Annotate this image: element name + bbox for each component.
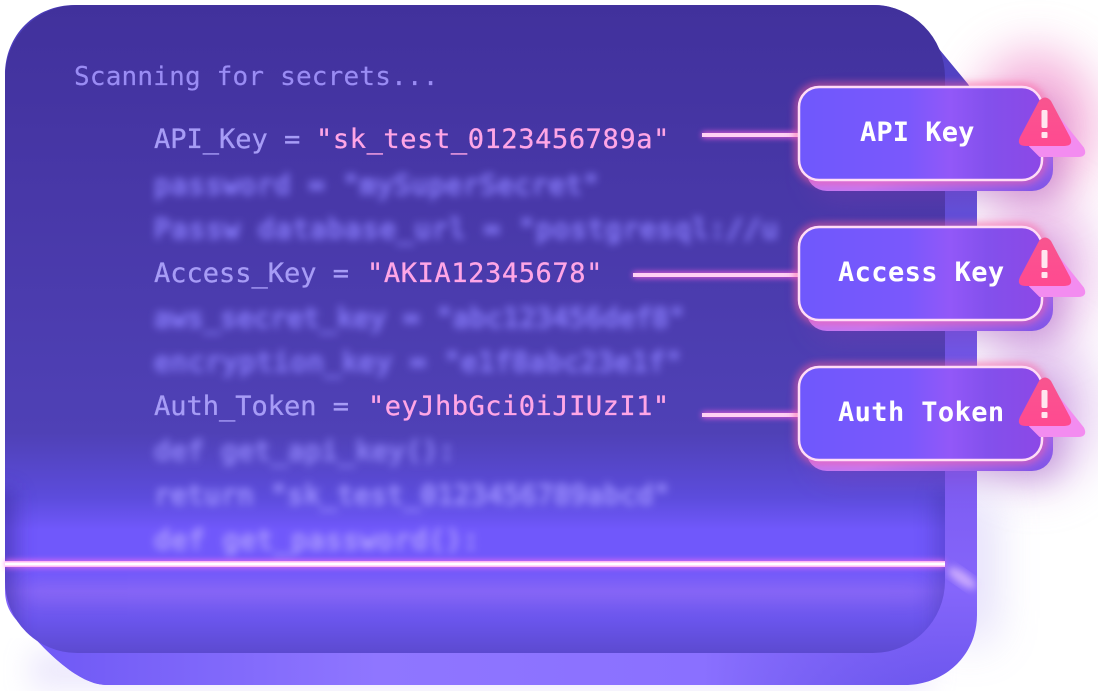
code: blurred lines: def get_api_key(): bbox=[154, 436, 456, 467]
code line: API key: API_Key = bbox=[154, 124, 300, 155]
scan line bbox=[5, 560, 945, 568]
tag: API Key bbox=[798, 86, 1084, 200]
code: blurred lines: def get_password(): bbox=[154, 525, 480, 556]
tag back plate bbox=[806, 376, 1053, 471]
tag label: Auth Token bbox=[838, 397, 1005, 428]
code line: auth token: Auth_Token = bbox=[154, 391, 349, 422]
icon: warning triangle bbox=[1019, 98, 1084, 156]
tag glow bbox=[798, 366, 1043, 461]
tag back plate bbox=[806, 96, 1053, 191]
connector: API key bbox=[702, 132, 799, 138]
scan reflection band bbox=[30, 588, 920, 598]
code: blurred lines: password = "mySuperSecret" bbox=[154, 170, 600, 201]
tag: Access Key bbox=[798, 226, 1084, 340]
code: blurred lines: aws_secret_key = "abc123456def8" bbox=[154, 303, 685, 334]
panel bottom edge bbox=[38, 641, 836, 685]
code: blurred lines bbox=[154, 170, 779, 556]
code: blurred lines: encryption_key = "e1f8abc23e1f" bbox=[154, 347, 683, 378]
tag shadow bbox=[812, 380, 1062, 480]
tag face bbox=[799, 367, 1042, 460]
heading: scanning for secrets: Scanning for secrets... bbox=[74, 62, 439, 92]
code: blurred lines: Passw database_url = "postgresql://u bbox=[154, 214, 779, 245]
tag back plate bbox=[806, 236, 1053, 331]
code: blurred lines: return "sk_test_0123456789abcd" bbox=[154, 480, 670, 511]
tag glow bbox=[798, 86, 1043, 181]
tag glow bbox=[798, 226, 1043, 321]
tag face bbox=[799, 227, 1042, 320]
code line: access key: "AKIA12345678" bbox=[367, 258, 603, 289]
tag shadow bbox=[812, 100, 1062, 200]
connector: access key bbox=[633, 272, 799, 278]
corner highlight bbox=[945, 563, 979, 593]
code line: auth token: "eyJhbGci0iJIUzI1" bbox=[368, 391, 670, 422]
icon: warning triangle bbox=[1019, 238, 1084, 296]
tag: Auth Token bbox=[798, 366, 1084, 480]
icon: warning triangle bbox=[1019, 378, 1084, 436]
code line: access key: Access_Key = bbox=[154, 258, 349, 289]
tag label: API Key bbox=[860, 117, 974, 148]
code line: API key: "sk_test_0123456789a" bbox=[316, 124, 670, 155]
tag shadow bbox=[812, 240, 1062, 340]
tag face bbox=[799, 87, 1042, 180]
tag label: Access Key bbox=[838, 257, 1005, 288]
connector: auth token bbox=[702, 412, 799, 418]
